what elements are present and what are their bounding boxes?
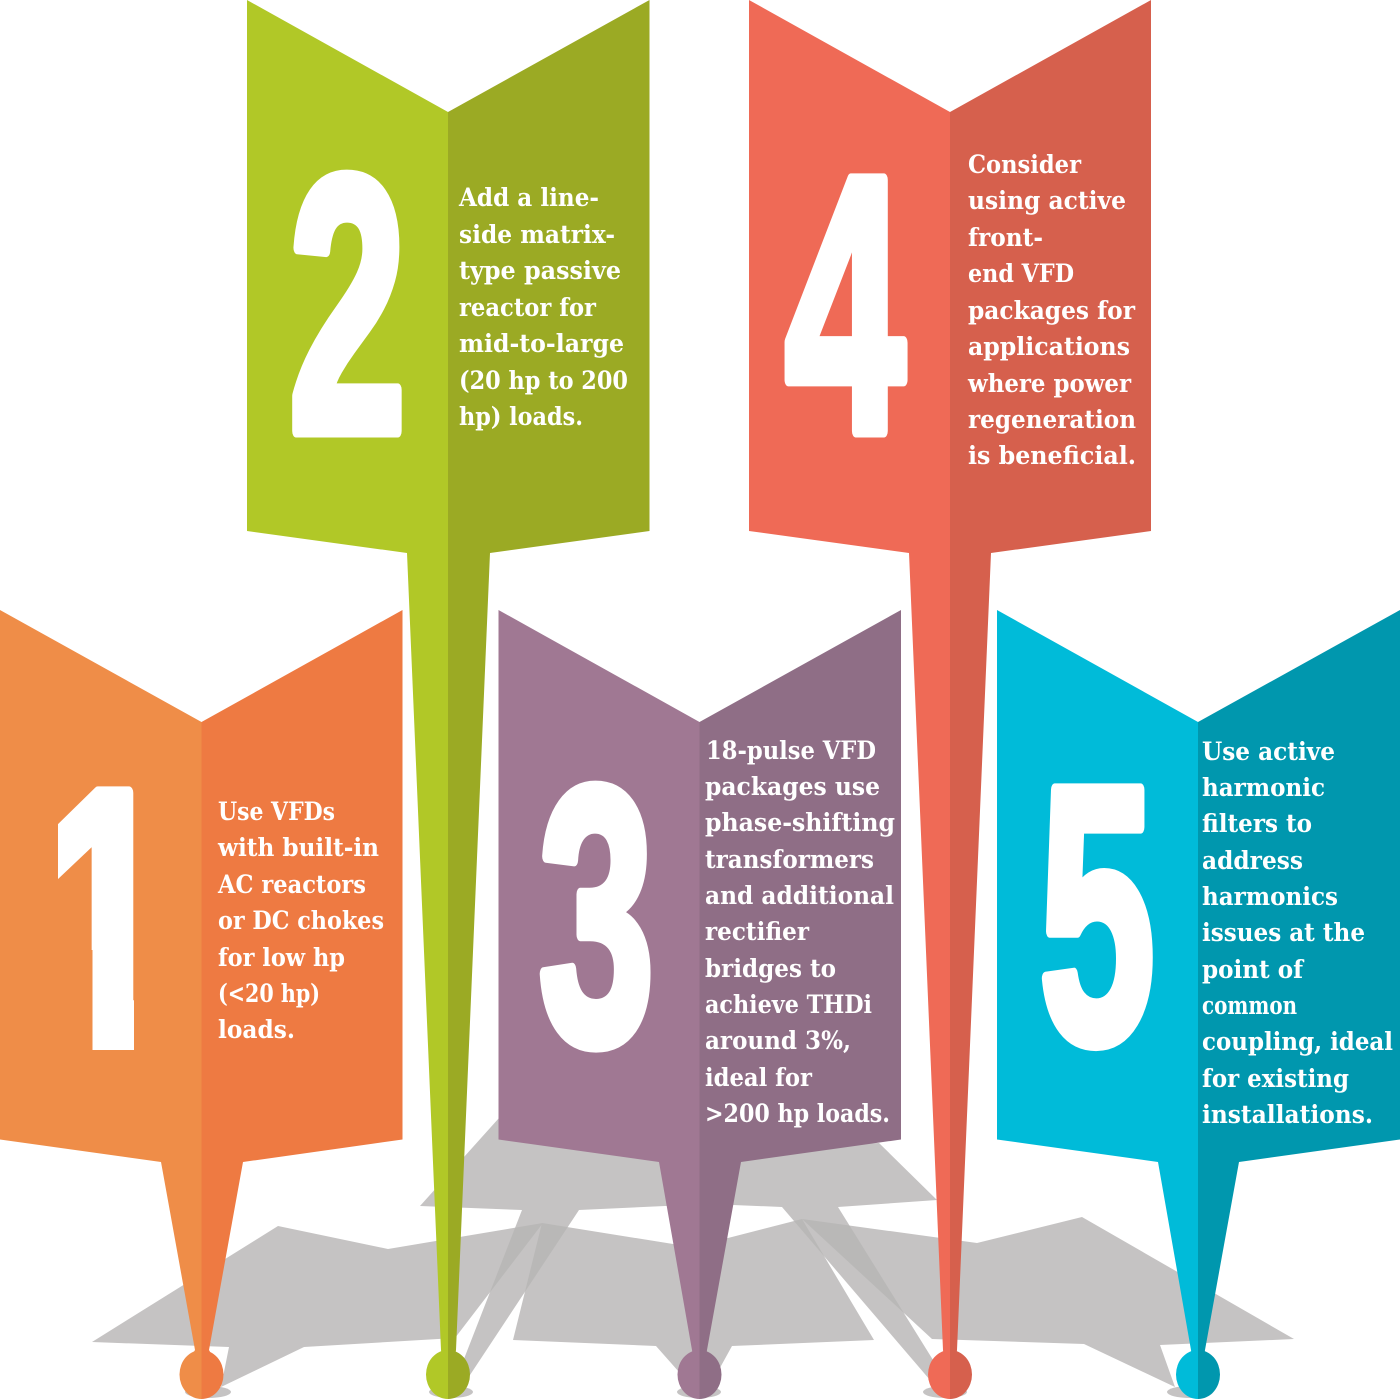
text: step 3	[705, 736, 895, 1129]
text: step 1: for low hp	[218, 943, 345, 973]
text: step 2: (20 hp to 200	[459, 366, 628, 396]
text: step 5: for existing	[1202, 1064, 1349, 1094]
text: step 2	[458, 183, 628, 432]
text: step 2: reactor for	[459, 293, 596, 323]
text: step 1: Use VFDs	[218, 797, 335, 827]
text: step 5: common	[1202, 991, 1297, 1021]
text: step 5	[1202, 737, 1393, 1130]
text: step 2: hp) loads.	[459, 402, 583, 432]
text: step 5: installations.	[1202, 1100, 1373, 1130]
panel: flag 5 blue	[997, 610, 1400, 1399]
text: step 3: around 3%,	[705, 1026, 851, 1056]
text: step 1: AC reactors	[217, 870, 366, 900]
panel: flag 3 purple	[498, 610, 901, 1399]
text: step 3: transformers	[705, 845, 874, 875]
text: step 5: address	[1202, 846, 1303, 876]
text: step 4: end VFD	[968, 259, 1074, 289]
text: step 4: Consider	[968, 150, 1081, 180]
text: step 2: mid-to-large	[459, 329, 624, 359]
text: step 5: issues at the	[1202, 918, 1365, 948]
text: step 3: 18-pulse VFD	[706, 736, 876, 766]
text: step 4: regeneration	[968, 405, 1136, 435]
text: step 5: harmonic	[1202, 773, 1325, 803]
text: step 4: applications	[968, 332, 1130, 362]
text: step 1: with built-in	[217, 833, 379, 863]
text: step 5: filters to	[1202, 809, 1312, 839]
text: step 2: Add a line-	[458, 183, 599, 213]
text: step 3: and additional	[705, 881, 894, 911]
text: step 5: Use active	[1202, 737, 1335, 767]
number 3: 3	[539, 711, 654, 1119]
text: step 4: is beneficial.	[968, 441, 1136, 471]
number 5: 5	[1039, 710, 1155, 1118]
text: step 3: achieve THDi	[705, 990, 872, 1020]
panel: flag 1 orange	[0, 610, 402, 1399]
number 1: 1	[40, 714, 174, 1122]
text: step 1: loads.	[218, 1015, 295, 1045]
text: step 4: using active	[968, 186, 1126, 216]
text: step 1	[217, 797, 384, 1045]
text: step 4: where power	[967, 369, 1132, 399]
number 4: 4	[785, 101, 906, 509]
text: step 2: side matrix-	[459, 220, 615, 250]
text: step 4: packages for	[968, 296, 1136, 326]
text: step 4	[967, 150, 1136, 471]
text: step 1: (<20 hp)	[218, 979, 320, 1009]
number 2: 2	[289, 102, 406, 509]
text: step 4: front-	[968, 223, 1043, 253]
ground shadows	[92, 1118, 1294, 1398]
text: step 3: bridges to	[705, 954, 836, 984]
text: step 1: or DC chokes	[218, 906, 384, 936]
text: step 3: phase-shifting	[705, 808, 895, 838]
panel: flag 2 green	[247, 0, 650, 1399]
panel: flag 4 red	[749, 0, 1151, 1399]
text: step 2: type passive	[459, 256, 621, 286]
text: step 5: point of	[1202, 955, 1305, 985]
text: step 3: >200 hp loads.	[705, 1099, 890, 1129]
text: step 3: rectifier	[705, 917, 810, 947]
text: step 3: ideal for	[705, 1063, 812, 1093]
text: step 3: packages use	[705, 772, 880, 802]
text: step 5: harmonics	[1202, 882, 1338, 912]
